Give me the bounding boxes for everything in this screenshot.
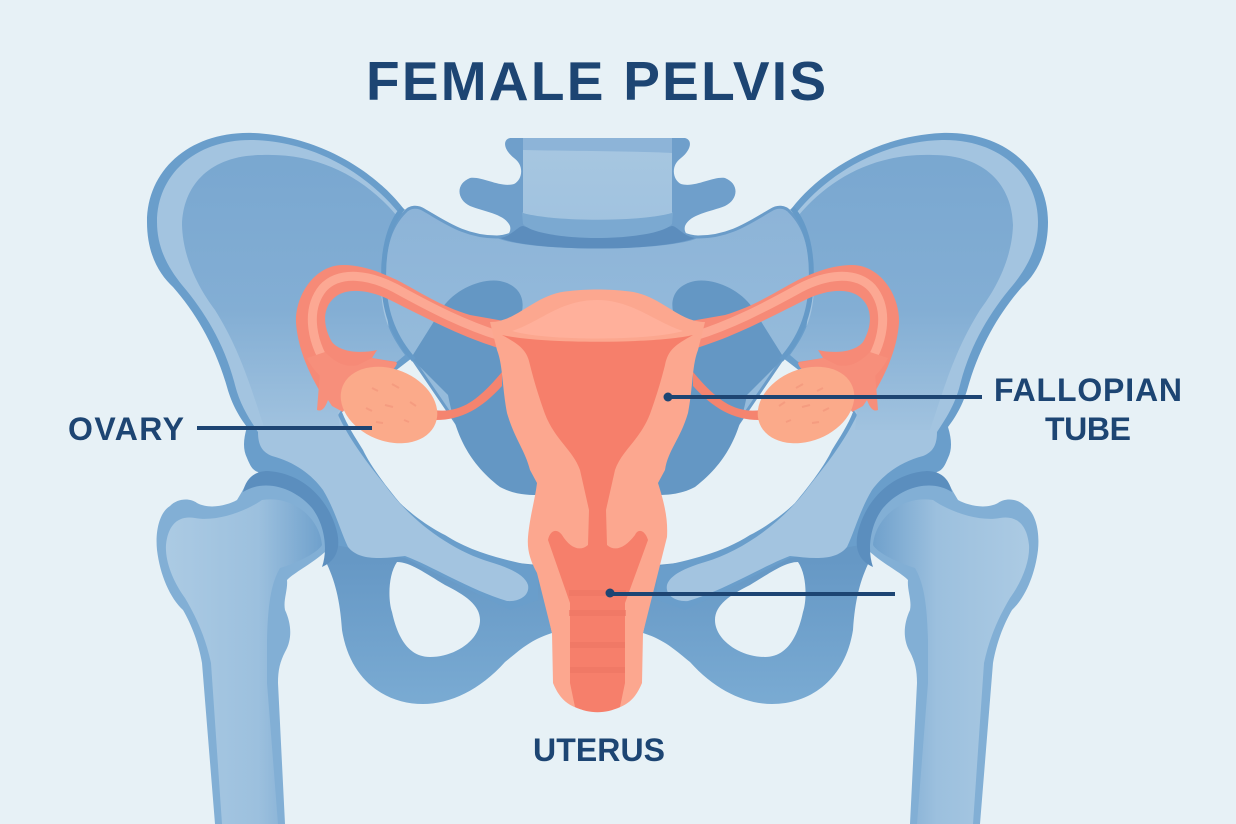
fallopian tube bbox=[296, 265, 510, 395]
femur shaft light bbox=[166, 499, 322, 824]
label: fallopian tube: TUBE bbox=[1045, 411, 1131, 447]
ovary leader line bbox=[197, 426, 372, 430]
right hip bone bbox=[643, 133, 1048, 704]
right femur bbox=[857, 471, 1038, 824]
sacroiliac joint line bbox=[384, 208, 414, 360]
uterus bbox=[490, 290, 705, 712]
tube light stripe bbox=[312, 276, 500, 372]
ovary texture bbox=[366, 384, 416, 423]
vertebra lower dark edge bbox=[500, 226, 695, 248]
ilium main fill bbox=[182, 155, 405, 430]
uterus outer wall bbox=[490, 290, 705, 712]
uterus leader line bbox=[610, 592, 895, 596]
ovary label text: OVARY bbox=[68, 411, 184, 447]
femur outer bbox=[157, 478, 326, 824]
uterus label text: UTERUS bbox=[533, 732, 665, 768]
vertebra top band bbox=[523, 138, 672, 153]
vertebra bottom band bbox=[522, 212, 673, 238]
right ovary and tube bbox=[685, 265, 899, 457]
fallopian tube leader line bbox=[668, 395, 982, 399]
ilium border bbox=[147, 133, 538, 610]
label: fallopian tube bbox=[664, 372, 1182, 447]
cervical stripes bbox=[569, 593, 626, 670]
fallopian tube label text: FALLOPIAN bbox=[994, 372, 1182, 408]
ilium light rim and ramus bbox=[157, 140, 528, 601]
sacrum dark lobes bbox=[411, 281, 784, 495]
sacrum bbox=[384, 207, 811, 480]
label: uterus bbox=[533, 588, 895, 768]
left hip bone bbox=[147, 133, 552, 704]
vertebra body bbox=[523, 138, 672, 220]
left ovary and tube bbox=[296, 265, 510, 457]
left femur bbox=[157, 471, 338, 824]
title: FEMALE PELVIS bbox=[366, 50, 826, 112]
vertebra bbox=[459, 138, 736, 248]
fundus highlight bbox=[512, 300, 683, 338]
ovarian ligament bbox=[434, 372, 502, 420]
fimbriae bbox=[307, 352, 397, 412]
vertebra transverse processes bbox=[459, 138, 736, 248]
uterine cavity bbox=[502, 335, 693, 712]
acetabulum crescent bbox=[243, 471, 338, 567]
ischium and pubis bbox=[325, 545, 552, 704]
ovary bbox=[329, 353, 449, 457]
